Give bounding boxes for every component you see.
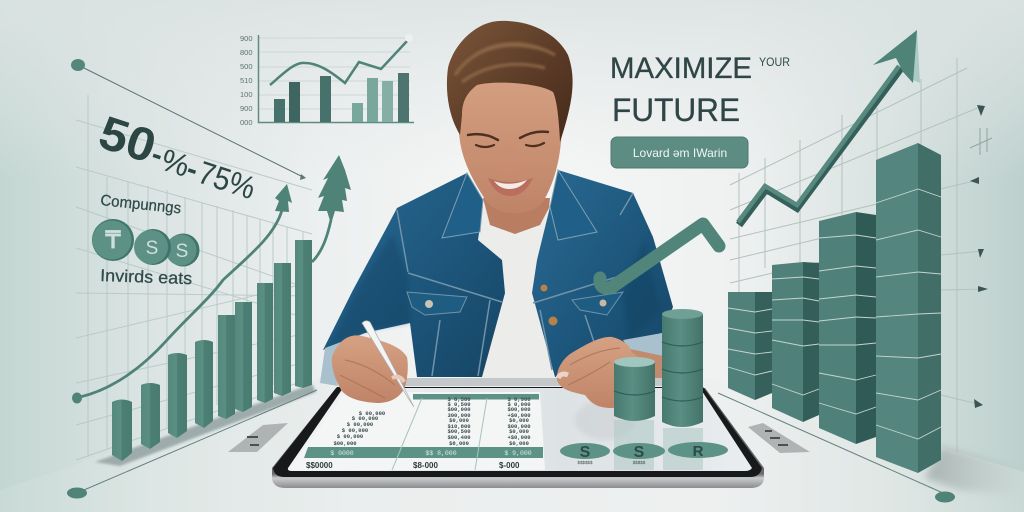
spreadsheet row values: $ 0,000 [507,401,531,408]
spreadsheet row values: $ 00,000 [352,415,378,422]
panel: left growth chart [71,59,351,466]
spreadsheet bottom totals [306,461,520,470]
spreadsheet bottom totals: $-000 [499,461,520,470]
eyes and brows [468,132,548,147]
spreadsheet page [290,392,545,470]
tick arrows [970,105,992,408]
label: compounding: Compunngs [100,192,182,217]
spreadsheet row values: $ 00,000 [359,410,385,417]
mini chart axes [258,35,414,122]
spreadsheet totals on highlight: $ 9,000 [504,450,532,457]
tall stack [662,309,703,427]
spreadsheet totals on highlight [330,450,532,457]
spreadsheet row values: 300,000 [447,412,471,419]
stepped bars [728,143,941,473]
tablet bezel [273,387,762,477]
tablet top edge [405,378,663,386]
mini chart bars [274,73,409,122]
mini chart axis labels: 100 [240,90,253,99]
mini chart axis labels: 900 [240,34,253,43]
tablet frame [272,388,764,488]
spreadsheet row values: $ 0,900 [507,396,531,403]
coin captions: $$$$$$ [577,460,593,465]
neck [483,198,550,234]
jacket [323,170,673,377]
spreadsheet row values: $ 00,000 [347,421,373,428]
coin stacks [614,309,703,427]
icon: dollar coins: ₸ [104,227,121,254]
spreadsheet bottom totals: $8-000 [413,461,438,470]
title: your: YOUR [759,57,790,69]
label: individuals: Invirds eats [100,266,192,288]
spreadsheet row values: $ 0,500 [447,401,471,408]
floor shadow [925,447,1024,495]
tablet [272,378,764,488]
spreadsheet row values: $8,000 [449,440,469,447]
spreadsheet row values: $00,000 [507,406,531,413]
green trend arrow [600,224,719,288]
spreadsheet row values: $ 8,580 [447,396,471,403]
spreadsheet row values: $10,800 [447,423,471,430]
right grid [730,58,987,452]
reflection of coin stacks [614,420,703,470]
coin captions [577,460,646,465]
spreadsheet row values: $0,000 [509,440,529,447]
person [320,21,673,386]
right keypad [748,423,810,453]
mini chart gridlines [258,38,410,109]
floor surface [0,378,1024,512]
t-shirt [478,205,562,380]
spreadsheet column lines [392,398,487,470]
hair [447,21,573,142]
percentage range label [93,105,265,206]
coin captions: $$$$$ [633,460,646,465]
big growth arrow [738,30,920,225]
spreadsheet row values: $0,000 [509,417,529,424]
hand reflection on screen [575,400,635,440]
right forearm [630,349,663,380]
diagonal pointer line [71,59,306,180]
spreadsheet row values: +$0,000 [507,412,531,419]
spreadsheet bottom totals: $$0000 [306,461,333,470]
button [611,137,748,168]
bar two [772,262,819,422]
bar four [876,143,941,473]
hair highlights [455,44,555,82]
mini chart axis labels: 800 [240,48,253,57]
icon: dollar coins [92,219,200,266]
percentage range label: 50 [93,105,163,173]
percentage range label: 75% [194,154,260,206]
spreadsheet row values: $00,500 [447,428,471,435]
panel: top mini chart [240,34,414,127]
mini chart axis labels: 000 [240,118,253,127]
percentage range label: - [183,152,202,187]
jacket seams and pockets [397,193,633,376]
mini chart trend line [270,34,413,85]
spreadsheet row values: $0,000 [449,417,469,424]
spreadsheet row values: $00,000 [333,440,357,447]
spreadsheet highlighted row [304,447,543,458]
bar three [819,212,876,444]
spreadsheet row values: $00,000 [447,406,471,413]
spreadsheet totals on highlight: $ 0000 [330,450,354,457]
spreadsheet row values: $ 00,000 [337,433,363,440]
tablet coin icons: S [634,444,645,461]
spreadsheet row values: $00,000 [507,423,531,430]
tablet coin icons: S [580,444,591,461]
spreadsheet row values [333,396,531,447]
jacket cuffs [320,333,664,386]
right hand [557,337,645,408]
short stack [614,357,655,421]
tablet screen [288,388,752,471]
jacket buttons [425,284,606,326]
left keypad [228,423,288,452]
jacket arm shading [330,235,660,345]
mini chart axis labels: 510 [240,76,253,85]
bar base shadow [95,384,316,466]
spreadsheet row values: +$0,000 [507,434,531,441]
button: Lovard əm IWarin [633,146,727,160]
spreadsheet header [413,394,539,400]
tall arrow [312,155,351,262]
growth curve arrow [72,184,292,404]
percentage range label: - [147,138,167,172]
title: maximize: MAXIMIZE [610,52,752,85]
mini chart axis labels [240,34,253,127]
spreadsheet row values: $ 00,000 [342,427,368,434]
mini chart axis labels: 500 [240,62,253,71]
panel: right 3d bars [728,30,1024,495]
spreadsheet row values: $0,000 [509,428,529,435]
title: future: FUTURE [612,92,740,128]
tablet coin icons: R [693,443,704,460]
left hand with pen [332,321,414,407]
left chart grid [76,95,312,460]
percentage range label: % [157,142,194,184]
jacket collars [442,170,597,240]
bar one [728,292,772,400]
icon: dollar coins: S [146,238,158,259]
mini chart axis labels: 900 [240,104,253,113]
icon: dollar coins: S [176,241,188,262]
floor pointer lines [67,390,955,502]
spreadsheet row values: $00,400 [447,434,471,441]
panel: title block [610,52,790,168]
bar chart [112,240,312,461]
spreadsheet [290,392,545,470]
face [459,65,562,213]
tablet coin icons [560,442,728,461]
nose and smile [488,145,533,196]
spreadsheet totals on highlight: $$ 8,000 [425,450,457,457]
